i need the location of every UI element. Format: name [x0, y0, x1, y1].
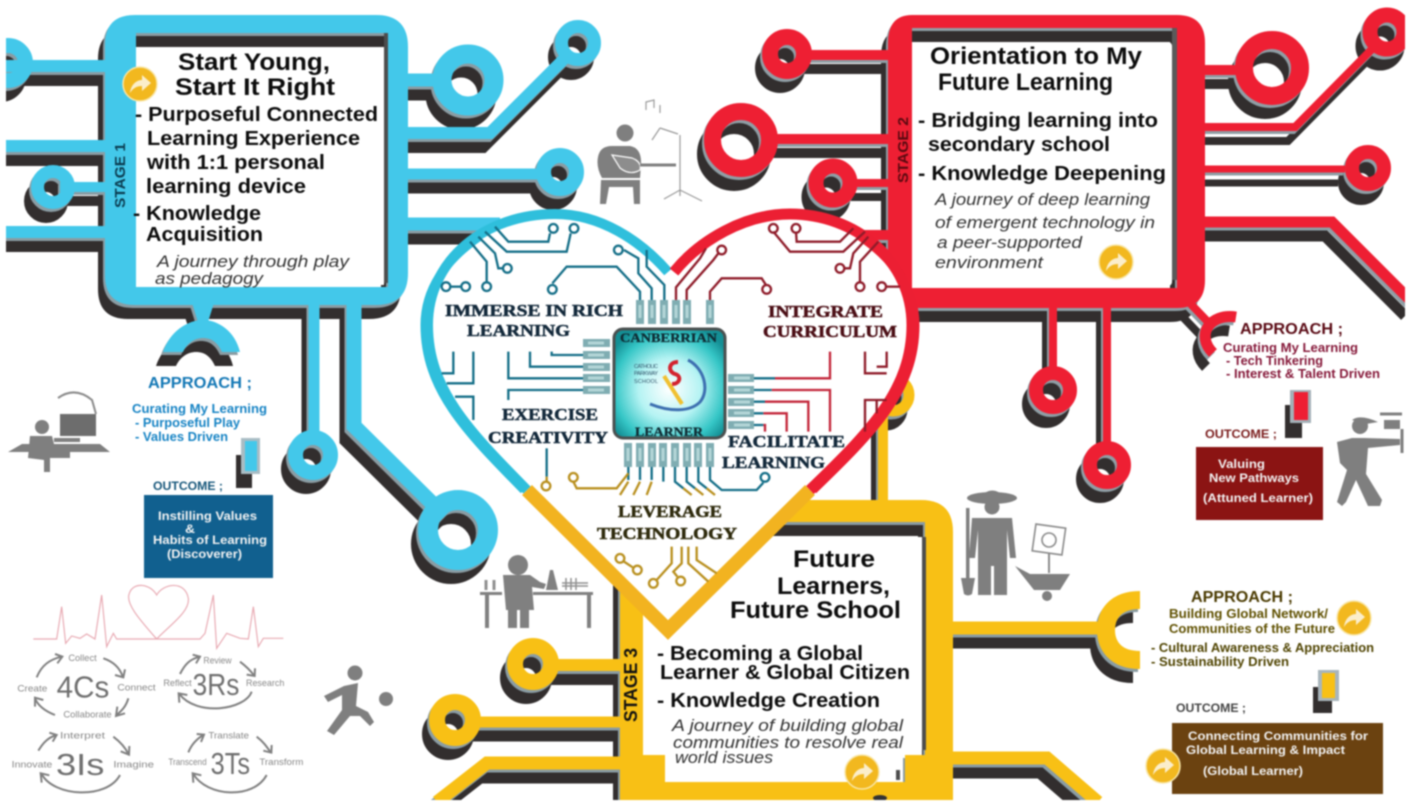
stage 1 label: STAGE 1 [112, 143, 129, 208]
stage 3 text block: Future School [730, 597, 901, 624]
heart label: facilitate learning [722, 432, 845, 472]
heart circuit traces: teal right pins [753, 378, 775, 425]
heart label: facilitate learning: LEARNING [722, 453, 825, 472]
outcome: stage 2: (Attuned Learner) [1203, 493, 1313, 505]
ecg heart line [33, 585, 283, 648]
outcome: stage 1: Instilling Values [158, 511, 257, 523]
approach: stage 1 [132, 375, 267, 444]
heart circuit traces: yellow side [542, 473, 717, 588]
icon: scientist at lab bench [480, 555, 593, 628]
stage 3 text block: communities to resolve real [673, 733, 904, 752]
stage 3 text block: - Knowledge Creation [657, 689, 880, 712]
outcome: stage 3: Connecting Communities for [1188, 731, 1369, 743]
stage 3 text block: Future [793, 546, 875, 573]
icon: soccer player [324, 666, 393, 735]
chip: canberrian learner [614, 329, 725, 439]
heart label: integrate curriculum: INTEGRATE [768, 302, 883, 321]
approach: stage 3 [1151, 589, 1374, 669]
stage 1 text block: - Knowledge [133, 202, 261, 225]
logo: SCHOOL [634, 379, 658, 385]
stage 1 text block: - Purposeful Connected [135, 103, 378, 126]
heart label: exercise creativity [488, 405, 608, 447]
connector: stage 3 approach to outcome [1313, 670, 1339, 713]
panel: stage 1 blue circuit frame [0, 15, 594, 574]
logo: CATHOLIC [634, 364, 658, 370]
stage 2 text block: Orientation to My [930, 43, 1143, 70]
3Rs cycle: Reflect [163, 678, 192, 688]
connector: stage 1 approach to outcome [236, 438, 260, 488]
3Is cycle [12, 730, 154, 792]
stage 1 text block: A journey through play [156, 252, 351, 271]
stage 1 text block: Start Young, [178, 49, 330, 76]
heart label: exercise creativity: CREATIVITY [488, 428, 608, 447]
stage 2 text block: - Bridging learning into [918, 109, 1158, 132]
approach: stage 3: APPROACH ; [1191, 589, 1293, 606]
chip pins [583, 300, 754, 467]
outcome: stage 3: (Global Learner) [1203, 766, 1303, 778]
approach: stage 2: - Tech Tinkering [1226, 354, 1323, 368]
heart label: immerse in rich learning [445, 301, 623, 340]
stage 3 text block [657, 546, 910, 767]
4Cs cycle: Collect [68, 653, 97, 663]
3Ts cycle [168, 730, 304, 792]
outcome: stage 1 [144, 479, 273, 578]
stage 2 text block: Future Learning [938, 69, 1113, 96]
outcome: stage 3 [1172, 701, 1383, 794]
stage 1 text block [133, 49, 378, 288]
heart circuit traces: red side [676, 224, 900, 432]
stage 1 text block: as pedagogy [155, 269, 265, 288]
chip: canberrian learner: CANBERRIAN [620, 330, 718, 345]
heart label: leverage technology: LEVERAGE [618, 502, 722, 521]
3Is cycle: Interpret [60, 730, 106, 740]
heart label: leverage technology: TECHNOLOGY [597, 524, 737, 543]
stage 1 text block: Acquisition [146, 223, 263, 246]
4Cs cycle: Collaborate [63, 709, 112, 719]
chip: canberrian learner: LEARNER [635, 424, 704, 439]
icon: stage 2 arrow [1099, 245, 1133, 279]
heart [425, 214, 915, 630]
stage 2 label: STAGE 2 [895, 117, 912, 183]
stage 1 text block: Learning Experience [147, 127, 360, 150]
3Is cycle: 3Is [56, 748, 104, 782]
stage 3 text block: - Becoming a Global [657, 642, 863, 665]
stage 1 text block: with 1:1 personal [146, 151, 325, 174]
icon: gardener with wheelbarrow [961, 490, 1070, 601]
outcome: stage 1: (Discoverer) [167, 549, 242, 561]
4Cs cycle: Connect [117, 683, 156, 693]
stage 3 label: STAGE 3 [621, 648, 641, 722]
icon: outcome arrow [1146, 749, 1180, 783]
stage 2 text block: - Knowledge Deepening [918, 162, 1166, 185]
3Rs cycle: Research [246, 678, 284, 688]
stage 2 text block: A journey of deep learning [934, 190, 1151, 209]
approach: stage 3: - Cultural Awareness & Appreciation [1151, 641, 1374, 655]
outcome: stage 1: OUTCOME ; [153, 479, 223, 493]
3Ts cycle: Translate [208, 730, 249, 740]
approach: stage 3: - Sustainability Driven [1151, 655, 1289, 669]
heart label: immerse in rich learning: LEARNING [467, 321, 570, 340]
stage 2 text block: environment [935, 253, 1044, 272]
outcome: stage 3: Global Learning & Impact [1186, 745, 1345, 757]
outcome: stage 2: Valuing [1218, 459, 1265, 471]
3Ts cycle: Transform [259, 757, 304, 767]
approach: stage 2: - Interest & Talent Driven [1226, 367, 1380, 381]
approach: stage 2: APPROACH ; [1240, 321, 1343, 338]
approach: stage 1: Curating My Learning [132, 402, 267, 416]
icon: person at desk [8, 392, 110, 472]
3Ts cycle: 3Ts [211, 747, 250, 781]
icon: stage 1 arrow [123, 67, 157, 101]
connector: stage 2 approach to outcome [1285, 390, 1311, 438]
stage 3 text block: Learner & Global Citizen [660, 661, 910, 684]
heart label: integrate curriculum: CURRICULUM [763, 322, 897, 341]
3Is cycle: Imagine [113, 759, 154, 769]
stage 2 text block: of emergent technology in [935, 213, 1155, 232]
stage 3 text block: A journey of building global [671, 716, 904, 735]
icon: guitar player [598, 100, 702, 204]
heart label: integrate curriculum [763, 302, 897, 341]
heart label: facilitate learning: FACILITATE [728, 432, 845, 451]
outcome: stage 3: OUTCOME ; [1176, 701, 1246, 715]
approach: stage 2: Curating My Learning [1223, 341, 1358, 355]
outcome: stage 2: OUTCOME ; [1205, 427, 1277, 441]
4Cs cycle: Create [17, 684, 47, 694]
icon: approach arrow [1337, 601, 1371, 635]
stage 3 text block: world issues [675, 748, 774, 767]
panel: stage 3 yellow circuit frame [430, 379, 1140, 808]
4Cs cycle [17, 653, 156, 719]
approach: stage 1: APPROACH ; [148, 375, 252, 392]
4Cs cycle: 4Cs [57, 670, 109, 704]
heart circuit traces: blue side [442, 224, 769, 490]
outcome: stage 1: Habits of Learning [153, 535, 267, 547]
stage 2 text block [918, 43, 1166, 272]
approach: stage 1: - Values Driven [135, 430, 228, 444]
3Ts cycle: Transcend [168, 757, 207, 767]
icon: photographer [1337, 414, 1402, 506]
heart circuit traces: red mid side [763, 352, 830, 432]
approach: stage 2 [1223, 321, 1380, 381]
outcome: stage 1: & [185, 524, 195, 536]
3Rs cycle [163, 655, 284, 708]
3Rs cycle: 3Rs [193, 668, 239, 702]
icon: stage 3 arrow [845, 755, 879, 789]
heart label: exercise creativity: EXERCISE [502, 405, 598, 424]
stage 3 text block: Learners, [777, 573, 890, 600]
heart label: leverage technology [597, 502, 737, 543]
3Is cycle: Innovate [12, 759, 52, 769]
approach: stage 1: - Purposeful Play [135, 416, 240, 430]
approach: stage 3: Communities of the Future [1169, 622, 1335, 636]
stage 2 text block: a peer-supported [937, 233, 1083, 252]
3Rs cycle: Review [203, 655, 232, 665]
approach: stage 3: Building Global Network/ [1169, 607, 1329, 621]
panel: stage 2 red circuit frame [706, 15, 1412, 496]
logo [634, 360, 705, 410]
stage 2 text block: secondary school [928, 133, 1110, 156]
stage 1 text block: learning device [146, 175, 306, 198]
outcome: stage 2 [1196, 427, 1323, 520]
outcome: stage 2: New Pathways [1209, 473, 1299, 485]
stage 1 text block: Start It Right [175, 74, 335, 101]
heart label: immerse in rich learning: IMMERSE IN RICH [445, 301, 623, 320]
logo: PARKWAY [634, 371, 658, 377]
